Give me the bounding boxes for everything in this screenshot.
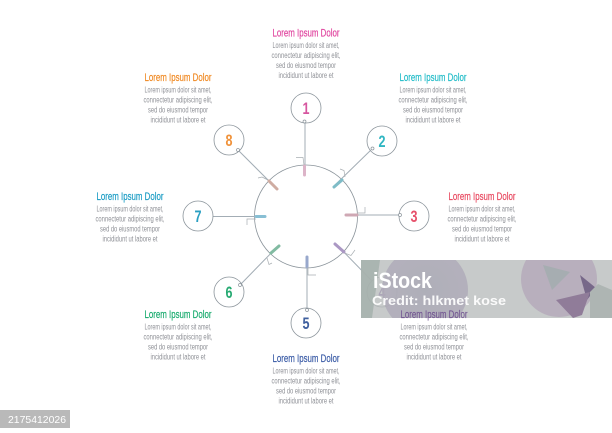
watermark banner: Credit: hlkmet kose — [372, 293, 506, 308]
text block 2: connectetur adipiscing elit, — [398, 96, 468, 104]
watermark banner — [361, 260, 612, 318]
text block 3: connectetur adipiscing elit, — [448, 214, 516, 224]
text block 3: incididunt ut labore et — [454, 234, 510, 244]
text block 6: sed do eiusmod tempor — [148, 342, 208, 352]
step 4 node: 4 — [378, 283, 386, 302]
text block 1: connectetur adipiscing elit, — [272, 51, 340, 60]
text block 1: Lorem Ipsum Dolor — [272, 28, 340, 40]
text block 2: Lorem Ipsum Dolor — [400, 72, 467, 84]
text block 8: incididunt ut labore et — [150, 116, 206, 124]
text block 2: sed do eiusmod tempor — [403, 106, 463, 114]
text block 3: Lorem ipsum dolor sit amet, — [448, 204, 516, 214]
text block 3: sed do eiusmod tempor — [452, 224, 512, 234]
text block 2 — [398, 72, 468, 124]
step 8 node — [214, 125, 277, 189]
text block 6 — [144, 309, 212, 362]
text block 8: Lorem Ipsum Dolor — [144, 72, 212, 84]
watermark banner: iStock — [373, 268, 433, 293]
step 6 node: 6 — [226, 283, 232, 302]
text block 8: connectetur adipiscing elit, — [144, 96, 212, 104]
step 7 node: 7 — [194, 207, 202, 226]
text block 4: sed do eiusmod tempor — [404, 342, 464, 352]
text block 8: Lorem ipsum dolor sit amet, — [144, 86, 212, 94]
text block 8: sed do eiusmod tempor — [148, 106, 208, 114]
step 5 node — [291, 256, 321, 338]
text block 3 — [448, 191, 516, 244]
text block 4: Lorem Ipsum Dolor — [400, 309, 468, 321]
text block 5: incididunt ut labore et — [278, 396, 334, 406]
step 2 node: 2 — [378, 132, 386, 151]
text block 1: incididunt ut labore et — [278, 71, 334, 80]
step 3 node: 3 — [410, 207, 418, 226]
text block 7 — [96, 191, 164, 244]
text block 7: sed do eiusmod tempor — [100, 224, 160, 234]
step 4 node — [335, 243, 397, 307]
step 1 node — [291, 93, 321, 176]
central circle — [254, 165, 358, 268]
text block 2: Lorem ipsum dolor sit amet, — [400, 86, 466, 94]
text block 4: Lorem ipsum dolor sit amet, — [400, 322, 468, 332]
text block 7: connectetur adipiscing elit, — [96, 214, 164, 224]
text block 6: incididunt ut labore et — [150, 352, 206, 362]
text block 4 — [400, 309, 468, 362]
text block 4: incididunt ut labore et — [406, 352, 462, 362]
step 1 node: 1 — [302, 99, 310, 118]
text block 7: Lorem Ipsum Dolor — [96, 191, 164, 203]
image id tag: 2175412026 — [8, 414, 66, 426]
text block 3: Lorem Ipsum Dolor — [448, 191, 516, 203]
text block 1: sed do eiusmod tempor — [276, 61, 336, 70]
text block 5 — [272, 353, 340, 406]
text block 4: connectetur adipiscing elit, — [400, 332, 468, 342]
text block 7: incididunt ut labore et — [102, 234, 158, 244]
text block 5: sed do eiusmod tempor — [276, 386, 336, 396]
text block 6: connectetur adipiscing elit, — [144, 332, 212, 342]
text block 5: Lorem Ipsum Dolor — [272, 353, 340, 365]
text block 8 — [144, 72, 212, 124]
step 3 node — [346, 201, 429, 231]
text block 7: Lorem ipsum dolor sit amet, — [96, 204, 164, 214]
step 5 node: 5 — [302, 314, 310, 333]
text block 6: Lorem Ipsum Dolor — [144, 309, 212, 321]
text block 5: Lorem ipsum dolor sit amet, — [272, 366, 340, 376]
text block 5: connectetur adipiscing elit, — [272, 376, 340, 386]
step 6 node — [214, 245, 279, 307]
text block 1: Lorem ipsum dolor sit amet, — [272, 41, 340, 50]
step 7 node — [183, 201, 265, 231]
step 8 node: 8 — [226, 131, 232, 150]
text block 1 — [272, 28, 340, 80]
text block 6: Lorem ipsum dolor sit amet, — [144, 322, 212, 332]
text block 2: incididunt ut labore et — [406, 116, 461, 124]
image id tag — [0, 410, 70, 428]
step 2 node — [334, 126, 397, 187]
